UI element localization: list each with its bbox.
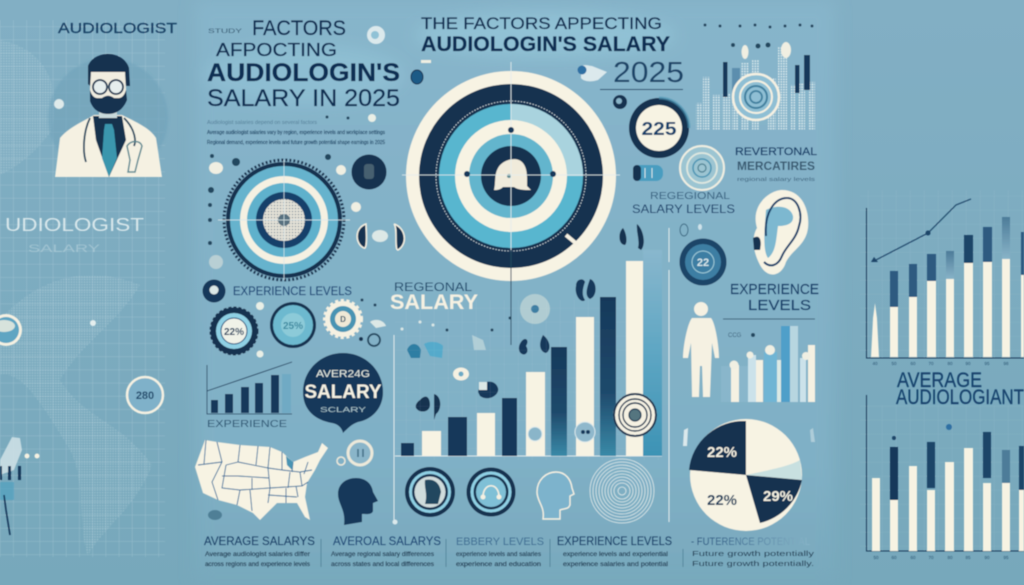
label: pie slices: 22% bbox=[707, 492, 737, 509]
icons: left cluster dots bbox=[208, 26, 385, 269]
text block: intro: Audiologist salaries depend on several factors bbox=[207, 120, 317, 126]
icon: concentric cream ring bbox=[680, 146, 724, 190]
footer column: future potential bbox=[691, 536, 814, 568]
label: audiologist: AUDIOLOGIST bbox=[58, 20, 177, 37]
label: pie slices bbox=[707, 444, 793, 509]
icon: teal badge bbox=[270, 302, 316, 348]
icon: ear bbox=[753, 190, 808, 275]
label: audiologist salary ghost: SALARY bbox=[28, 243, 101, 255]
label: upper axis ticks: 60 bbox=[910, 361, 916, 366]
label: upper axis ticks: 80 bbox=[947, 361, 953, 366]
footer column: future potential: Future growth potentially. bbox=[692, 559, 814, 568]
panel: left audiologist panel bbox=[0, 20, 177, 557]
footer column: average salaries: Average audiologist salaries differ bbox=[205, 551, 311, 558]
footer column: average regional salaries: AVEROAL SALARYS bbox=[333, 534, 441, 548]
heading: average audiologist bbox=[896, 369, 1024, 409]
icon: dark circle bbox=[352, 154, 386, 190]
icon: navy ring badge bbox=[680, 238, 726, 286]
chart: dotted equaliser with ring bbox=[696, 24, 815, 130]
text block: intro: Regional demand, experience levels and future growth potential shape earnings in 2025 bbox=[207, 140, 385, 146]
panel: central infographic bbox=[195, 0, 835, 585]
footer column: average salaries: across regions and experience levels bbox=[205, 561, 311, 568]
heading: average audiologist: AVERAGE bbox=[897, 369, 982, 392]
label: upper axis ticks: 95 bbox=[984, 361, 990, 366]
heading: regional salary levels: REGEGIONAL bbox=[650, 191, 731, 202]
title: right block bbox=[421, 14, 684, 90]
label: lower axis ticks: 60 bbox=[891, 555, 897, 560]
footer column: average regional salaries: Average regional salary differences bbox=[331, 551, 435, 558]
icon: outlined head bbox=[537, 472, 574, 519]
text block: reverional measures: regional salary levels bbox=[737, 177, 816, 183]
icon: small ear pair bbox=[619, 224, 702, 262]
heading: experience levels right bbox=[730, 281, 819, 314]
icon: badge gear: 22% bbox=[224, 327, 244, 338]
footer column: experience levels: experience levels and experiential bbox=[563, 551, 669, 558]
label: lower axis ticks: 90 bbox=[984, 555, 990, 560]
footer column: experience levels: experience salaries and potential bbox=[563, 561, 669, 568]
title: left block: AFPOCTING bbox=[216, 40, 337, 60]
text block: intro bbox=[207, 120, 385, 146]
icon: scattered icons near the target bbox=[411, 60, 627, 109]
title: left block: SALARY IN 2025 bbox=[207, 85, 400, 112]
callout: average salary bubble bbox=[303, 353, 383, 433]
title: right block: AUDIOLOGIN'S SALARY bbox=[421, 33, 670, 56]
chart: experience bars bbox=[721, 319, 815, 402]
title: right block: THE FACTORS APPECTING bbox=[421, 14, 662, 33]
footer column: average salaries bbox=[204, 534, 315, 568]
heading: experience levels right: LEVELS bbox=[748, 297, 811, 314]
icon: navy ring badge: 22 bbox=[697, 257, 709, 269]
label: upper axis ticks: 70 bbox=[928, 361, 934, 366]
icon: 2025 badge: 225 bbox=[642, 119, 676, 139]
icon: 2025 badge bbox=[629, 98, 689, 158]
icon: person bbox=[683, 302, 719, 397]
icons: near pie bbox=[683, 428, 815, 446]
label: pie slices: 29% bbox=[763, 488, 793, 505]
icon: main target bbox=[402, 62, 620, 285]
divider line bbox=[668, 270, 670, 522]
label: audiologist salary ghost bbox=[5, 215, 144, 255]
label: experience: EXPERIENCE bbox=[207, 418, 287, 430]
footer column: levels: EBBERY LEVELS bbox=[456, 536, 544, 548]
footer column: experience levels: EXPERIENCE LEVELS bbox=[557, 534, 672, 548]
footer column: levels: experience and education bbox=[456, 561, 541, 568]
icon: percentage badge bbox=[127, 377, 163, 413]
label: lower axis ticks bbox=[873, 555, 1009, 560]
callout: average salary bubble: AVER24G bbox=[316, 369, 370, 380]
panel: right charts bbox=[860, 190, 1024, 560]
footer column: levels bbox=[456, 536, 544, 568]
heading: experience levels bbox=[202, 280, 352, 302]
icon: badge gear bbox=[210, 308, 258, 354]
icon: cream gear bbox=[325, 301, 361, 337]
label: lower axis ticks: 60 bbox=[910, 555, 916, 560]
label: lower axis ticks: 50 bbox=[873, 555, 879, 560]
label: upper axis ticks: 50 bbox=[891, 361, 897, 366]
icon: headphone ring one bbox=[405, 467, 455, 517]
label: audiologist salary ghost: UDIOLOGIST bbox=[5, 215, 144, 235]
heading: regional salary levels bbox=[632, 191, 735, 216]
icon: small ring by map bbox=[208, 441, 372, 520]
chart: pie bbox=[689, 419, 802, 531]
icon: ear pair bbox=[357, 224, 404, 250]
label: upper axis ticks: 90 bbox=[965, 361, 971, 366]
chart: experience bars: CCG bbox=[728, 333, 742, 339]
chart: main rising bars bbox=[392, 250, 662, 524]
label: upper axis ticks bbox=[872, 361, 1009, 366]
title: left block: STUDY bbox=[208, 29, 242, 35]
footer column: average salaries: AVERAGE SALARYS bbox=[204, 534, 315, 548]
icon: navy head silhouette bbox=[338, 478, 378, 525]
icon: left ring bbox=[0, 314, 22, 346]
icon: headphone ring two bbox=[466, 468, 516, 516]
heading: regional salary levels: SALARY LEVELS bbox=[632, 202, 735, 216]
footer column: levels: experience levels and salaries bbox=[456, 551, 542, 558]
heading: experience levels: EXPERIENCE LEVELS bbox=[233, 286, 352, 298]
text block: reverional measures: REVERTONAL bbox=[735, 146, 817, 158]
map: usa states bbox=[195, 440, 328, 520]
title: right block: 2025 bbox=[613, 57, 684, 89]
icon: blue device bbox=[633, 165, 663, 181]
icon: doctor portrait bbox=[54, 54, 162, 177]
label: lower axis ticks: 95 bbox=[1003, 555, 1009, 560]
heading: regional salary bbox=[390, 280, 478, 314]
icon: percentage badge: 280 bbox=[136, 390, 154, 402]
label: lower axis ticks: 85 bbox=[965, 555, 971, 560]
footer column: average regional salaries: across states and local differences bbox=[331, 561, 435, 568]
icon: teal badge: 25% bbox=[283, 321, 303, 332]
chart: experience mini bars bbox=[207, 362, 292, 430]
icon: concentric sound waves bbox=[590, 459, 654, 523]
title: left block: AUDIOLOGIN'S bbox=[207, 59, 400, 87]
callout: average salary bubble: SALARY bbox=[304, 382, 382, 403]
heading: regional salary: SALARY bbox=[390, 291, 478, 314]
callout: average salary bubble: SCLARY bbox=[320, 405, 366, 414]
footer column: average regional salaries bbox=[331, 534, 441, 568]
icon: small target bbox=[218, 160, 350, 280]
icon: concentric target on bars bbox=[613, 393, 657, 437]
footer column: experience levels bbox=[557, 534, 672, 568]
icon: microphone bbox=[0, 320, 96, 535]
text block: reverional measures bbox=[735, 146, 817, 183]
chart: lower bars bbox=[866, 395, 1024, 560]
footer column: future potential: - FUTERENCE POTENTIAL bbox=[691, 536, 810, 548]
heading: experience levels right: EXPERIENCE bbox=[730, 281, 819, 298]
title: left block bbox=[207, 17, 400, 112]
footer: five text columns bbox=[204, 534, 814, 568]
label: lower axis ticks: 70 bbox=[928, 555, 934, 560]
text block: intro: Average audiologist salaries vary by region, experience levels and workplace settings bbox=[207, 130, 385, 136]
heading: regional salary: REGEONAL bbox=[394, 280, 472, 294]
label: lower axis ticks: 80 bbox=[947, 555, 953, 560]
label: upper axis ticks: 98 bbox=[1003, 361, 1009, 366]
label: pie slices: 22% bbox=[707, 444, 737, 461]
title: left block: FACTORS bbox=[252, 17, 346, 40]
icon: cream gear: D bbox=[340, 315, 346, 324]
chart: upper bars bbox=[866, 199, 1024, 366]
footer column: future potential: Future growth potentially bbox=[692, 549, 814, 558]
icons: scattered center icons bbox=[360, 279, 596, 420]
label: upper axis ticks: 40 bbox=[872, 361, 878, 366]
text block: reverional measures: MERCATIRES bbox=[737, 159, 815, 173]
icon: small rings bbox=[256, 302, 386, 358]
